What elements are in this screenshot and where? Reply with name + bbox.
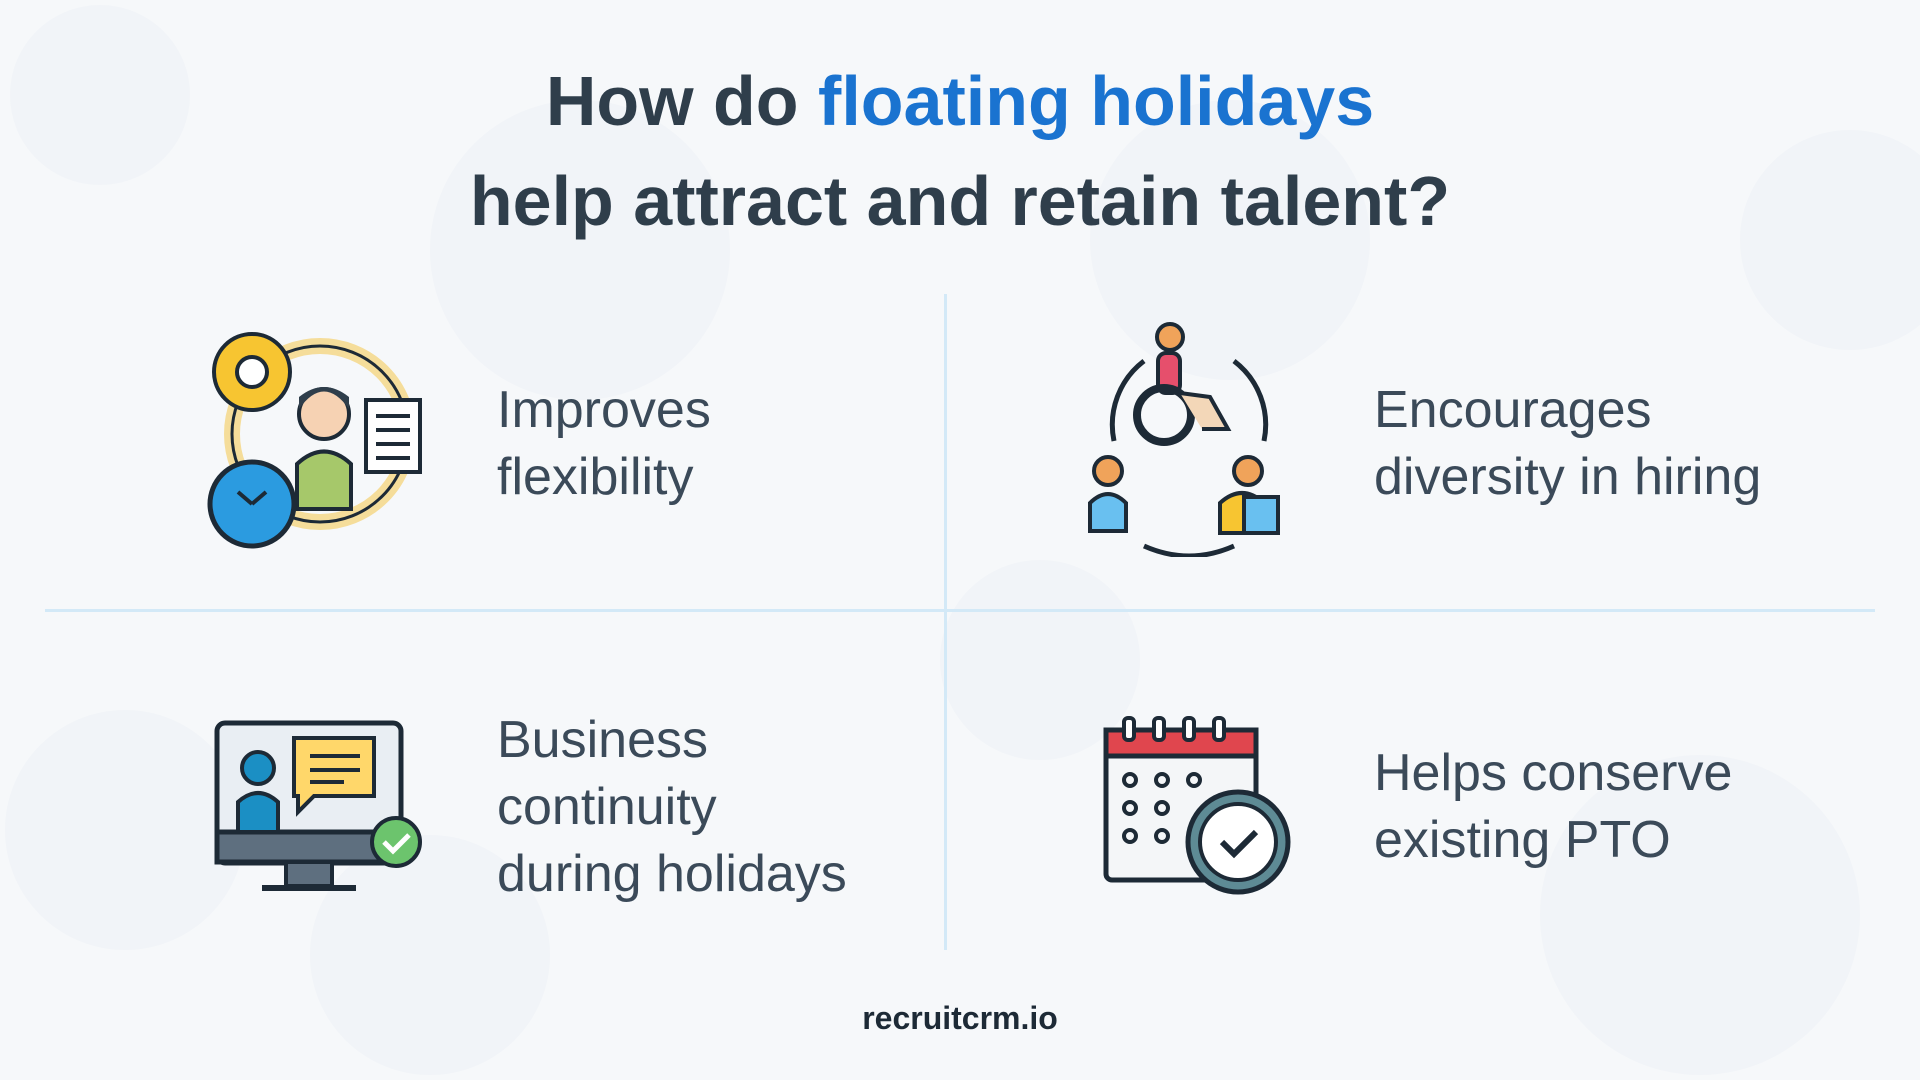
divider horizontal	[45, 609, 1875, 612]
title	[470, 62, 1450, 240]
text: conserve PTO	[1374, 744, 1732, 869]
text: conserve PTO: existing PTO	[1374, 811, 1671, 869]
icon: flexibility	[208, 332, 422, 548]
text: encourages diversity	[1374, 381, 1761, 506]
text: improves flexibility	[497, 381, 711, 506]
icon: business continuity	[214, 720, 422, 891]
title: help attract and retain talent?	[470, 162, 1450, 240]
text: business continuity: during holidays	[497, 845, 847, 903]
text: encourages diversity: diversity in hiring	[1374, 448, 1761, 506]
text: business continuity: Business	[497, 711, 708, 769]
text: business continuity: continuity	[497, 778, 717, 836]
icon: diversity	[1088, 322, 1280, 557]
text: improves flexibility: Improves	[497, 381, 711, 439]
text: business continuity	[497, 711, 847, 903]
icon: calendar clock	[1104, 716, 1290, 894]
divider vertical	[944, 294, 947, 950]
title: How do floating holidays	[546, 62, 1374, 140]
footer: recruitcrm.io	[862, 1000, 1058, 1036]
text: conserve PTO: Helps conserve	[1374, 744, 1732, 802]
text: improves flexibility: flexibility	[497, 448, 694, 506]
text: encourages diversity: Encourages	[1374, 381, 1652, 439]
